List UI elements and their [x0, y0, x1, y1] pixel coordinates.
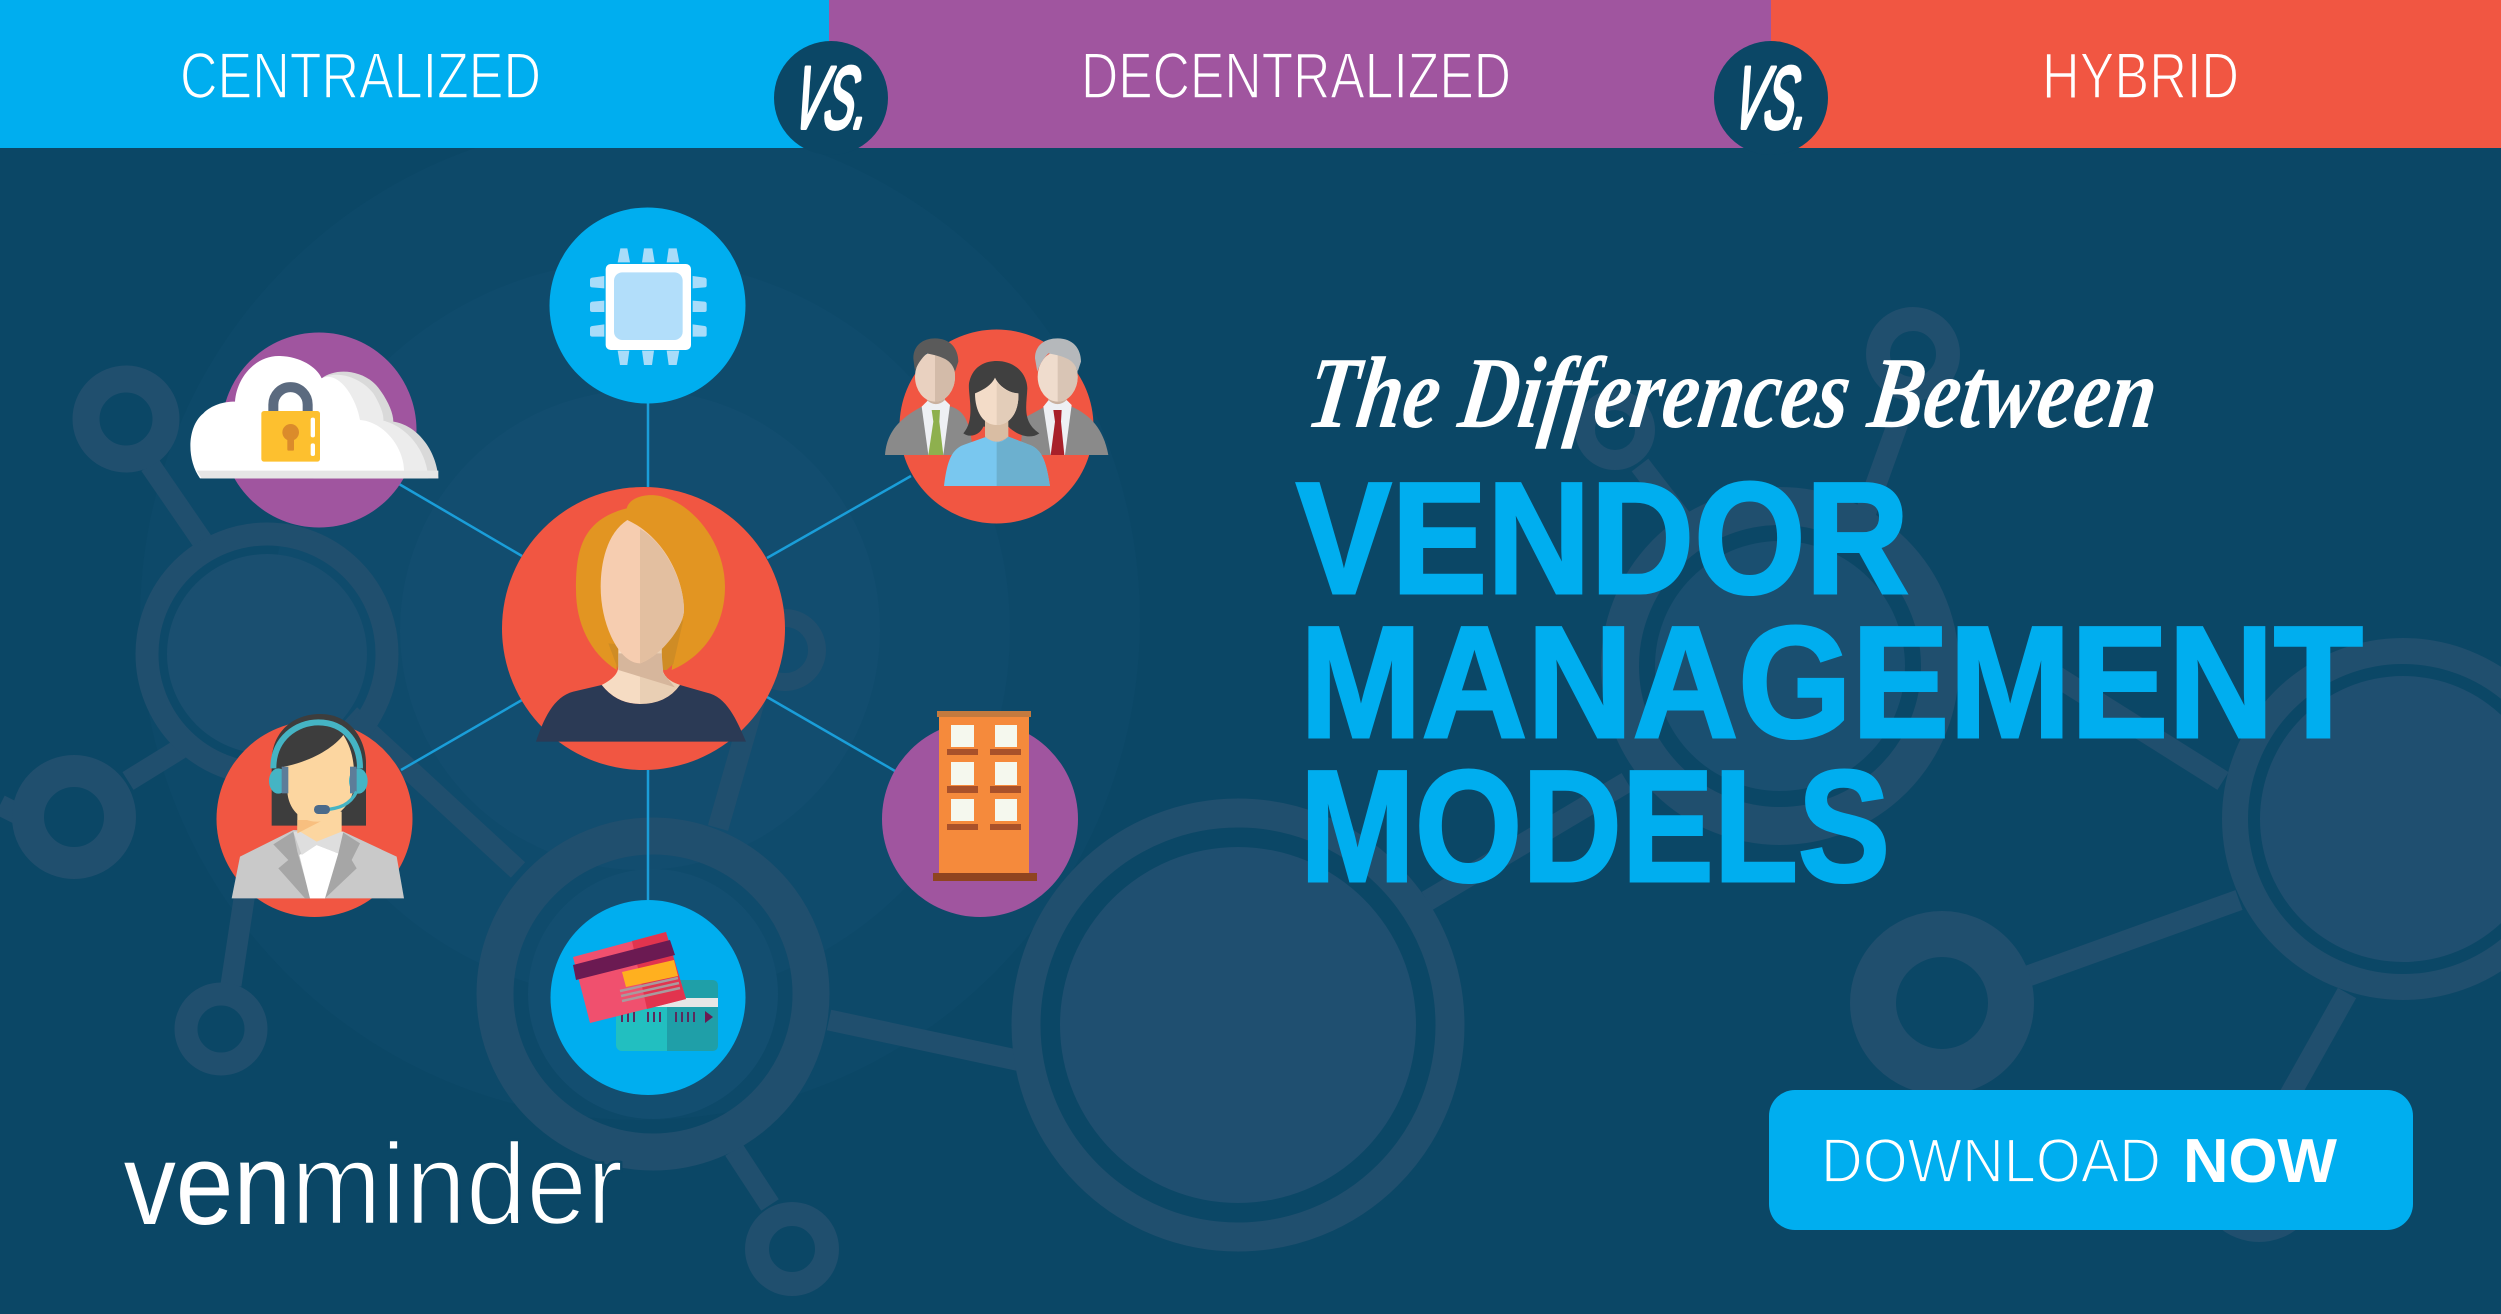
vs badge 2 [1714, 41, 1828, 155]
title: MODELS [1300, 737, 1890, 915]
icon: call center agent [216, 714, 412, 917]
logo: venminder [124, 1119, 623, 1249]
logo: venminder: ven [124, 1119, 291, 1249]
header band: hybrid: HYBRID [2042, 39, 2239, 112]
header band: centralized [0, 0, 829, 148]
title [1296, 449, 2363, 915]
logo: venminder: minder [291, 1119, 623, 1249]
icon: cloud with padlock [190, 332, 438, 528]
title: VENDOR [1296, 449, 1909, 627]
vs badge 1 [774, 41, 888, 155]
icon: payment cards [550, 900, 746, 1095]
vs badge 1: VS. [788, 49, 879, 147]
script heading: The Differences Between [1301, 337, 2165, 450]
header band: decentralized: DECENTRALIZED [1081, 39, 1511, 112]
header band: centralized: CENTRALIZED [180, 39, 541, 112]
vs badge 2: VS. [1728, 49, 1819, 147]
title: MANAGEMENT [1300, 593, 2363, 771]
icon: office building [882, 711, 1078, 917]
download button: NOW [2183, 1127, 2337, 1196]
icon: team of three people [885, 330, 1108, 524]
download button: DOWNLOAD [1821, 1127, 2161, 1196]
header band: hybrid [1771, 0, 2501, 148]
download button [1769, 1090, 2413, 1230]
icon: central woman portrait [502, 487, 785, 770]
connector lines [399, 403, 911, 900]
icon: microchip [550, 208, 746, 404]
header band: decentralized [829, 0, 1771, 148]
